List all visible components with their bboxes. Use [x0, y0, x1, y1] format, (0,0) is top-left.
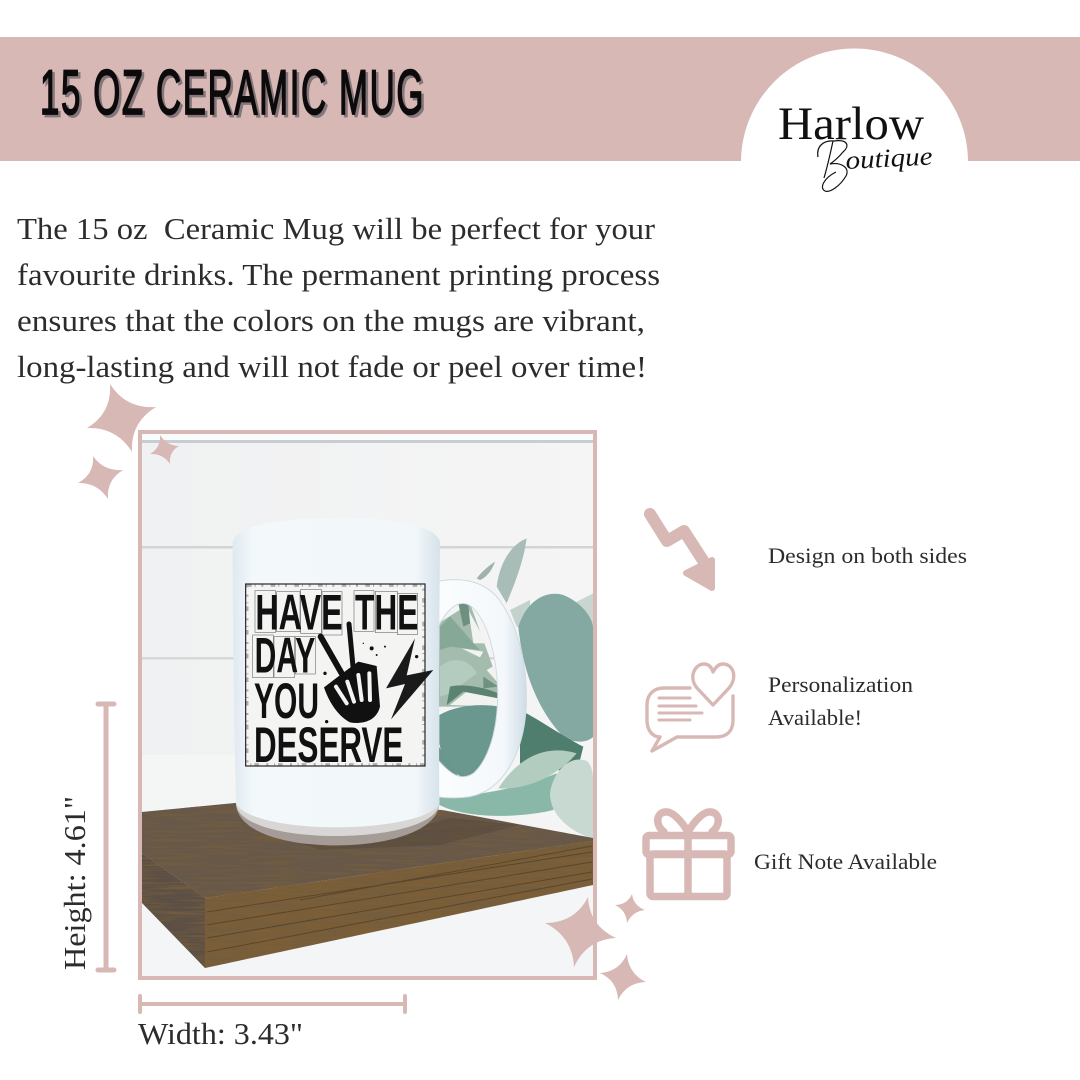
printed design [246, 584, 433, 773]
description text: long-lasting and will not fade or peel over time! [17, 349, 647, 384]
photo frame [140, 432, 595, 978]
height dimension [57, 704, 114, 970]
mug body [233, 518, 440, 845]
logo: Harlow Boutique: outique [845, 141, 933, 175]
icon: gift box [646, 812, 731, 896]
description text: favourite drinks. The permanent printing process [17, 257, 660, 292]
icon: chat bubble with heart [647, 664, 734, 751]
title: 15 OZ CERAMIC MUG [42, 60, 428, 130]
mug [233, 518, 526, 845]
printed design: HAVE [255, 584, 343, 640]
skeleton hand [321, 624, 380, 723]
eucalyptus leaves [437, 538, 593, 838]
sparkles top left [78, 384, 179, 499]
width dimension: Width: 3.43" [138, 1016, 303, 1051]
feature: personalization available: Available! [768, 705, 862, 730]
printed design: YOU [254, 673, 319, 729]
description text: The 15 oz Ceramic Mug will be perfect for your [17, 211, 656, 246]
feature: personalization available: Personalization [768, 672, 913, 697]
photo wall background [142, 434, 593, 976]
printed design: DESERVE [254, 717, 403, 773]
description text [17, 211, 660, 384]
feature: design on both sides: Design on both sides [768, 543, 967, 568]
header band [0, 37, 1080, 161]
logo: Harlow Boutique [741, 48, 968, 200]
feature: personalization available [768, 672, 913, 730]
width dimension [138, 996, 405, 1051]
lightning bolt [386, 638, 433, 719]
printed design: DAY [255, 628, 315, 684]
height dimension: Height: 4.61" [57, 796, 92, 970]
mug handle [437, 580, 526, 798]
wooden board [142, 803, 593, 968]
logo: Harlow Boutique: Harlow [778, 98, 924, 150]
icon: zigzag arrow [650, 514, 712, 588]
sparkles bottom right [545, 894, 646, 1000]
description text: ensures that the colors on the mugs are vibrant, [17, 303, 645, 338]
feature: gift note available: Gift Note Available [754, 849, 937, 874]
printed design: THE [355, 584, 418, 640]
title [40, 58, 428, 130]
product photo: mug on wooden board [142, 434, 593, 976]
title: 15 OZ CERAMIC MUG [40, 58, 425, 128]
